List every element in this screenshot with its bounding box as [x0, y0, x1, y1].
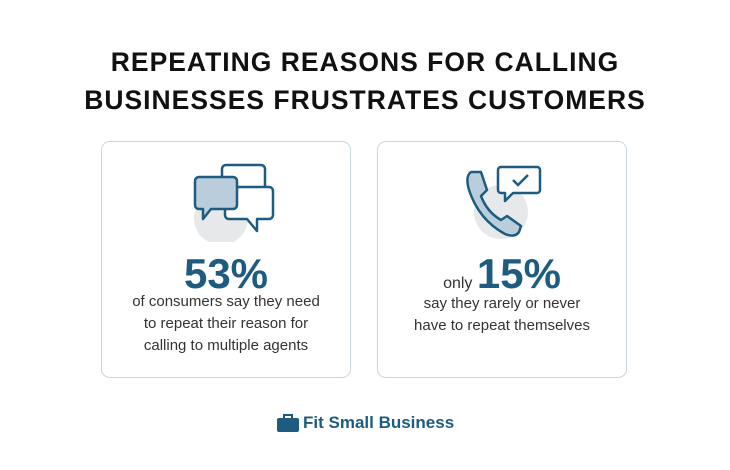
panel: 53% [101, 141, 351, 378]
text [132, 293, 320, 354]
stat: only 15%: only 15% [443, 250, 561, 297]
text: say they rarely or never [424, 295, 580, 312]
text: of consumers say they need [132, 293, 320, 310]
icon: briefcase [277, 414, 299, 432]
text: have to repeat themselves [414, 317, 590, 334]
stat: 53%: 53% [184, 250, 268, 297]
icon: chat bubbles [194, 164, 274, 242]
text [414, 295, 590, 334]
panel: 15% [377, 141, 627, 378]
title [84, 47, 646, 115]
text: to repeat their reason for [144, 315, 308, 332]
title: BUSINESSES FRUSTRATES CUSTOMERS [84, 85, 646, 115]
title: REPEATING REASONS FOR CALLING [111, 47, 619, 77]
text: calling to multiple agents [144, 337, 308, 354]
icon: phone with check [466, 166, 542, 239]
logo: Fit Small Business [303, 413, 454, 432]
